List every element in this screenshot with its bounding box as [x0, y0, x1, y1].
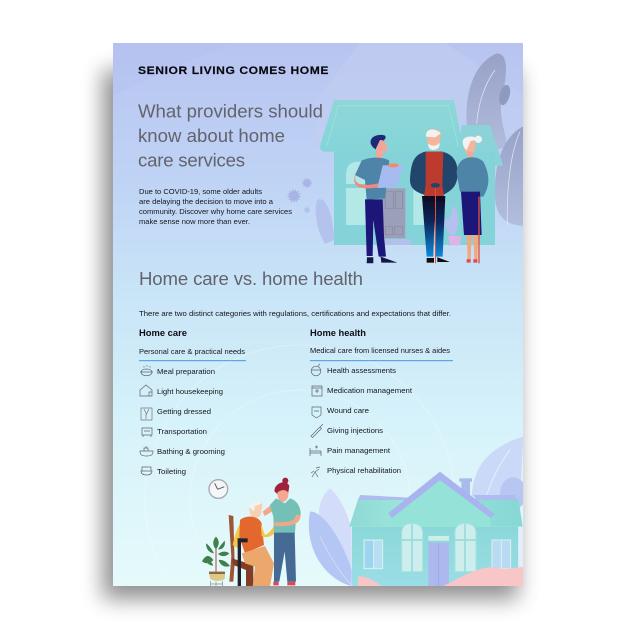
main heading: care services [138, 150, 245, 170]
right annex roof [457, 125, 503, 166]
illustration: teal house with three people [316, 100, 503, 263]
home health list: Medication management [327, 386, 412, 395]
illustration: virus particles [289, 179, 311, 212]
wall clock [209, 480, 228, 498]
door [428, 536, 449, 541]
main heading [138, 104, 322, 166]
page drop shadow [103, 70, 518, 599]
person: older man with cane [410, 129, 458, 263]
home health subheading: Medical care from licensed nurses & aides [310, 346, 450, 355]
left square window [364, 540, 383, 569]
intro paragraph: community. Discover why home care services [139, 207, 292, 216]
home care list [157, 367, 225, 476]
back leaves [472, 437, 523, 497]
infographic page [88, 43, 532, 614]
illustration: bottom right house [309, 437, 527, 586]
faded background house [113, 43, 523, 150]
home care list: Getting dressed [157, 407, 211, 416]
wall [352, 527, 518, 586]
home care list: Meal preparation [157, 367, 215, 376]
potted plant [202, 537, 230, 587]
arched windows [402, 523, 476, 572]
intro paragraph: are delaying the decision to move into a [139, 197, 274, 206]
illustration: bottom left caregiver and seated man [202, 478, 301, 587]
column: home care [139, 328, 246, 476]
illustration: top leaves [466, 53, 523, 226]
chair [229, 515, 253, 587]
page panel [113, 43, 523, 586]
right window [413, 188, 437, 225]
small left leaf [316, 199, 334, 244]
intro paragraph: Due to COVID-19, some older adults [139, 187, 262, 196]
gable [415, 480, 490, 526]
left window [346, 162, 377, 225]
intro paragraph: make sense now more than ever. [139, 217, 250, 226]
home care subheading: Personal care & practical needs [139, 347, 245, 356]
home health list [327, 366, 412, 475]
person: caregiver with clipboard [354, 135, 403, 263]
home care icons [140, 365, 153, 475]
title: SENIOR LIVING COMES HOME [138, 65, 329, 77]
home care rule [139, 360, 246, 361]
home health rule [310, 360, 453, 361]
section intro: There are two distinct categories with regulations, certifications and expectations that differ. [139, 309, 451, 318]
home care list: Bathing & grooming [157, 447, 225, 456]
home health list: Health assessments [327, 366, 396, 375]
intro paragraph [139, 187, 292, 226]
home health icons [310, 364, 323, 477]
pink ground [443, 567, 523, 586]
home health list: Giving injections [327, 426, 383, 435]
main heading: know about home [138, 125, 285, 146]
background circles [144, 344, 454, 554]
column: home health [310, 328, 453, 477]
home health list: Wound care [327, 406, 369, 415]
home care list: Transportation [157, 427, 207, 436]
person: older woman with cane [457, 136, 488, 263]
home health heading: Home health [310, 328, 366, 338]
home care list: Light housekeeping [157, 387, 223, 396]
main heading: What providers should [138, 100, 323, 122]
home health list: Pain management [327, 446, 390, 455]
home health list: Physical rehabilitation [327, 466, 401, 475]
right square window [492, 540, 511, 569]
seated man [232, 502, 274, 586]
home care list: Toileting [157, 467, 186, 476]
main roof [320, 100, 464, 152]
door [383, 188, 405, 238]
caregiver [263, 478, 301, 585]
roofs [349, 498, 523, 527]
home care heading: Home care [139, 328, 187, 338]
house wall [334, 152, 495, 245]
potted plant [445, 205, 458, 237]
section heading: Home care vs. home health [139, 268, 363, 289]
